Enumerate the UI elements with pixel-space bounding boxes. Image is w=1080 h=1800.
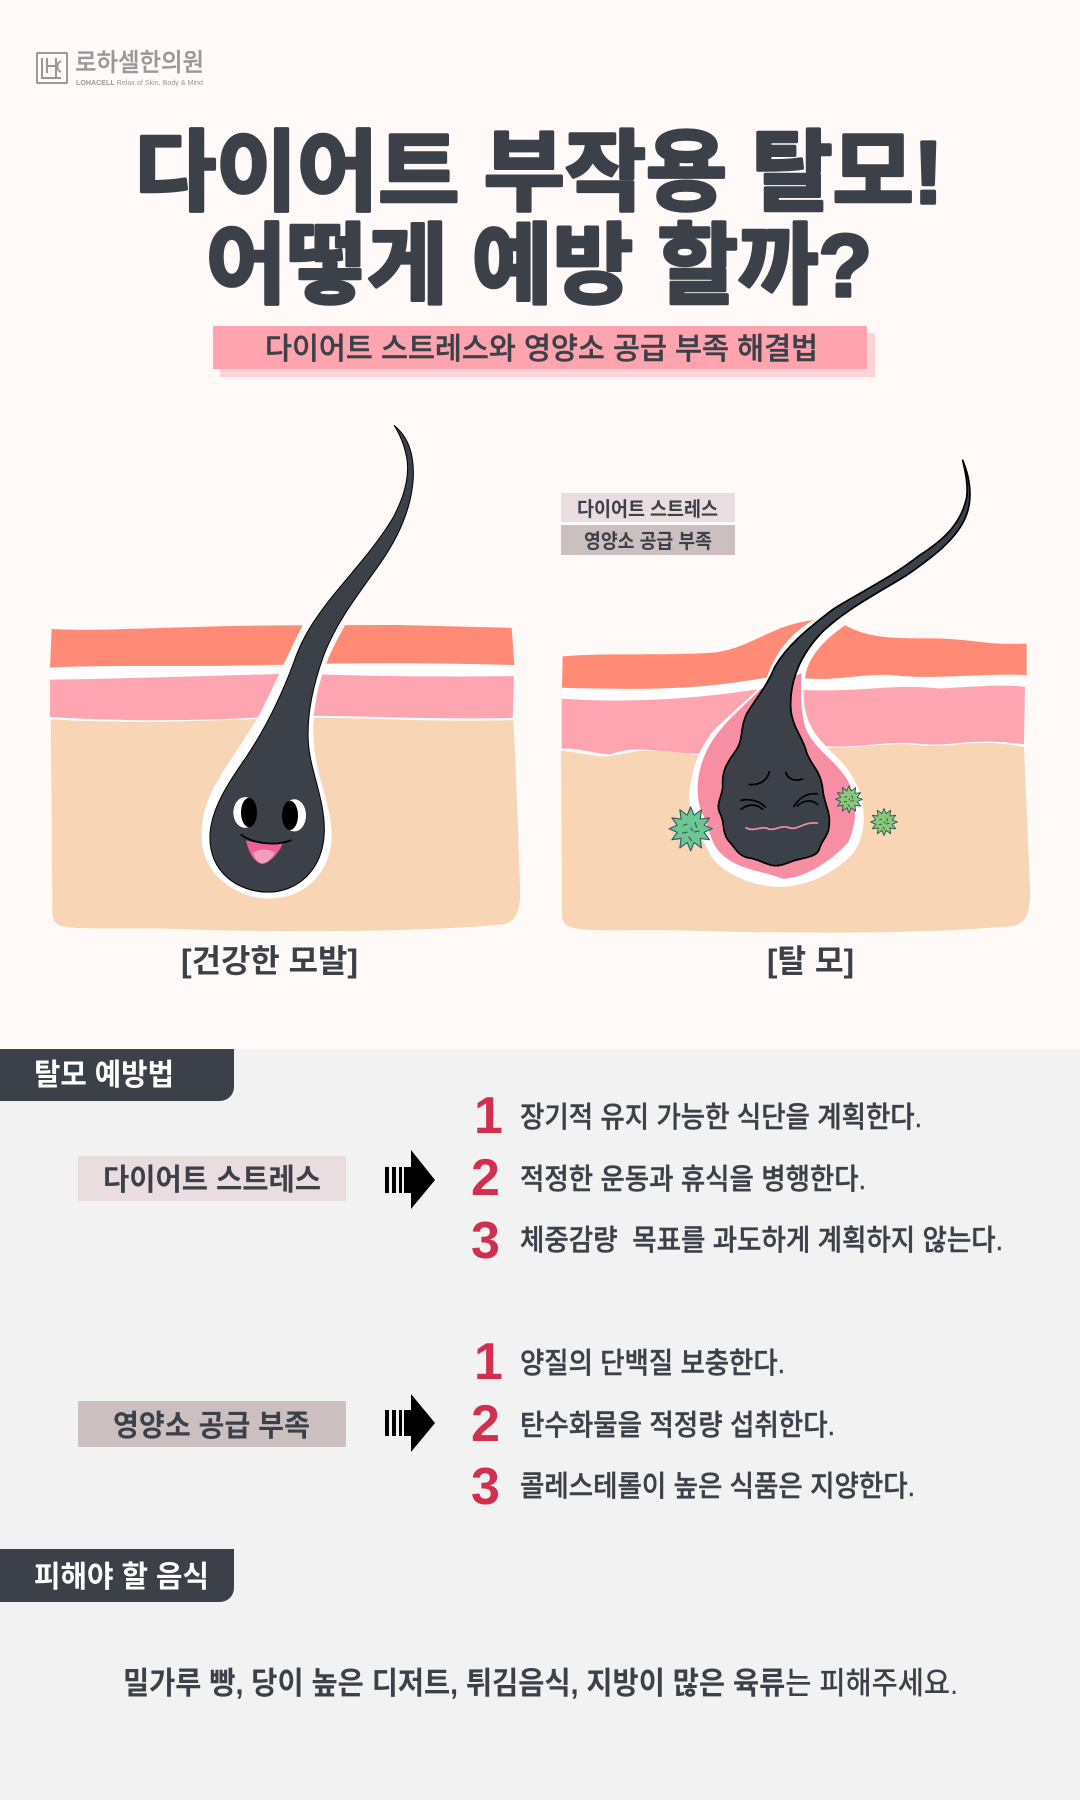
section tab: foods to avoid: 피해야 할 음식: [34, 1561, 209, 1594]
label: nutrient deficit: 영양소 공급 부족: [113, 1410, 310, 1443]
tip 3: 3: [471, 1212, 500, 1270]
skin layers: [50, 625, 520, 931]
arrow: nutrient deficit: [385, 1394, 435, 1452]
tip 2: [471, 1395, 835, 1453]
face: happy: [233, 797, 306, 864]
cause tag: diet stress: 다이어트 스트레스: [577, 498, 718, 521]
tip 1: 장기적 유지 가능한 식단을 계획한다.: [520, 1101, 922, 1134]
logo: [37, 49, 204, 87]
section tab: foods to avoid: [0, 1549, 234, 1602]
inflamed follicle: [698, 673, 855, 879]
section tab: prevention: 탈모 예방법: [34, 1059, 174, 1092]
follicle outline: [689, 620, 864, 887]
illustration: healthy hair: [50, 425, 520, 931]
tip 1: [474, 1087, 922, 1145]
tip 2: 2: [471, 1395, 500, 1453]
tip 2: 적정한 운동과 휴식을 병행한다.: [520, 1163, 866, 1196]
arrow: diet stress: [385, 1150, 435, 1209]
hair: [718, 460, 970, 866]
label: nutrient deficit: [78, 1401, 346, 1447]
list: diet stress tips: [471, 1087, 1003, 1270]
tip 1: 1: [474, 1087, 503, 1145]
section tab: prevention: [0, 1049, 234, 1101]
logo name: 로하셀한의원: [75, 49, 204, 77]
tip 3: 체중감량 목표를 과도하게 계획하지 않는다.: [520, 1224, 1003, 1257]
caption: hair loss: [탈 모]: [767, 943, 854, 979]
logo tagline: LOHACELL Relax of Skin, Body & Mind: [76, 78, 203, 87]
tip 2: 탄수화물을 적정량 섭취한다.: [520, 1409, 835, 1442]
caption: healthy: [건강한 모발]: [181, 943, 358, 979]
skin layers: [561, 620, 1030, 933]
foods to avoid text: 밀가루 빵, 당이 높은 디저트, 튀김음식, 지방이 많은 육류는 피해주세요.: [123, 1666, 958, 1701]
title: [135, 123, 943, 315]
tip 3: [471, 1212, 1003, 1270]
hair: [210, 425, 413, 892]
label: diet stress: 다이어트 스트레스: [103, 1164, 321, 1197]
tip 2: [471, 1149, 866, 1207]
follicle outline: [202, 624, 345, 899]
subtitle banner: 다이어트 스트레스와 영양소 공급 부족 해결법: [265, 333, 818, 366]
tip 1: 양질의 단백질 보충한다.: [520, 1347, 785, 1380]
tip 1: [474, 1333, 785, 1391]
cause tag: nutrient deficit: 영양소 공급 부족: [584, 530, 712, 553]
illustration: hair loss: [561, 460, 1030, 933]
tip 1: 1: [474, 1333, 503, 1391]
tip 3: 3: [471, 1458, 500, 1516]
cause tag: nutrient deficit: [561, 525, 735, 555]
virus: medium: [836, 786, 862, 813]
tip 2: 2: [471, 1149, 500, 1207]
title: 다이어트 부작용 탈모!: [135, 123, 943, 222]
title: 어떻게 예방 할까?: [206, 216, 872, 315]
label: diet stress: [78, 1156, 346, 1201]
cause tag: diet stress: [561, 493, 735, 522]
list: nutrient tips: [471, 1333, 915, 1516]
virus: small: [871, 808, 897, 836]
tip 3: 콜레스테롤이 높은 식품은 지양한다.: [520, 1470, 915, 1503]
icon: logo mark: [37, 53, 67, 83]
tip 3: [471, 1458, 915, 1516]
subtitle banner: [213, 326, 875, 377]
face: sad: [741, 772, 818, 829]
virus: large: [669, 807, 712, 851]
